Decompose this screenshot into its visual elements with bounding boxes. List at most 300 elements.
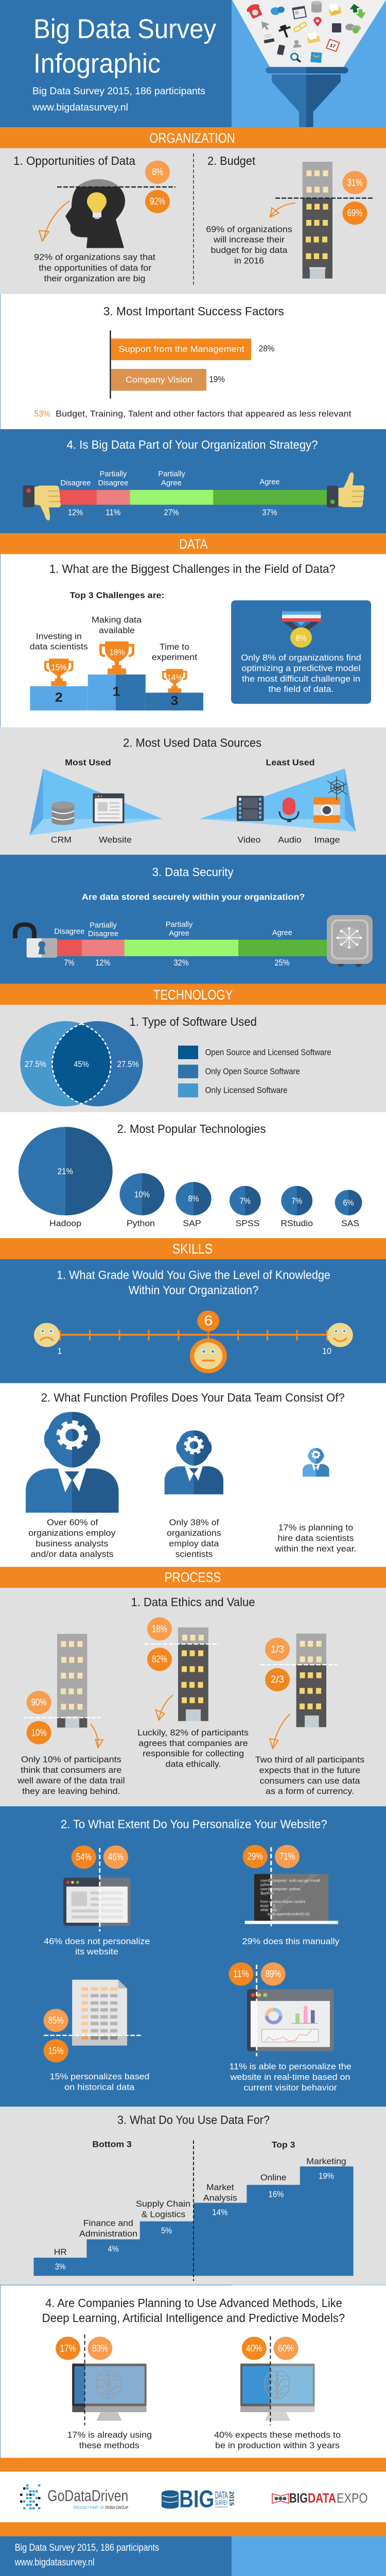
step: hr — [54, 2247, 67, 2272]
text: budget: budget for big data — [210, 246, 288, 255]
icon: browser window — [292, 6, 307, 20]
icon: analytics dashboard — [247, 1964, 334, 2056]
text: already using: these methods — [79, 2441, 139, 2450]
code snippet: python — [260, 1883, 271, 1887]
bubble: rstudio: 7% — [291, 1196, 302, 1206]
text: data scientists: scientists — [176, 1549, 213, 1559]
logos panel — [0, 2471, 386, 2522]
text: opportunities: their organization are big — [44, 274, 145, 283]
code snippet — [260, 1878, 320, 1917]
text: planning to hire: within the next year. — [274, 1544, 357, 1553]
heading: strategy: 4. Is Big Data Part of Your Organization Strategy? — [67, 438, 318, 452]
panel: data sources — [0, 727, 386, 855]
step: online — [260, 2173, 287, 2199]
step: marketing: Marketing — [306, 2157, 346, 2166]
heading: knowledge grade: Within Your Organization? — [129, 1284, 258, 1297]
arrow: opportunities — [39, 201, 69, 241]
labels: strategy: Disagree — [60, 479, 91, 487]
logo: godatadriven: GoDataDriven — [47, 2487, 128, 2504]
section band: technology: TECHNOLOGY — [153, 987, 233, 1003]
percent bubble 82% — [147, 1648, 172, 1671]
text: 82% — [137, 1728, 249, 1769]
bubble: hadoop — [19, 1127, 113, 1215]
percent bubble 40%: 40% — [246, 2343, 262, 2354]
heading: data usage: 3. What Do You Use Data For? — [117, 2113, 270, 2127]
panel: popular technologies — [0, 1112, 386, 1238]
icon: sad face — [34, 1323, 60, 1347]
text: analysts: and/or data analysts — [30, 1549, 113, 1559]
subheading: top 3: Top 3 Challenges are: — [69, 590, 164, 600]
step: market analysis: Analysis — [203, 2193, 237, 2202]
bubble 1/3: 1/3 — [271, 1644, 284, 1655]
labels: data sources: Video — [237, 835, 260, 844]
text: budget — [206, 225, 292, 265]
labels: data sources — [51, 835, 340, 844]
values: strategy: 37% — [262, 508, 277, 517]
percent bubble 31% — [343, 171, 367, 194]
heading: knowledge grade — [57, 1268, 330, 1297]
percent bubble 15% — [44, 2039, 68, 2062]
arrow: 82% — [155, 1695, 173, 1720]
percent bubble 69% — [343, 201, 367, 225]
logo: big data survey 2015: 2015 — [228, 2491, 235, 2506]
footer: Big Data Survey 2015, 186 participants — [15, 2543, 159, 2553]
title: Infographic — [33, 48, 161, 79]
subtitle and website: Big Data Survey 2015, 186 participants — [32, 86, 205, 97]
labels: data sources: CRM — [51, 835, 72, 844]
callout: predictive model: the field of data. — [269, 685, 334, 694]
labels: security — [54, 920, 292, 938]
labels: strategy: Partially — [100, 470, 127, 479]
icon: chat bubbles — [271, 7, 285, 15]
icon: router — [262, 33, 275, 43]
text: two thirds: expects that in the future — [259, 1766, 360, 1775]
text: 82%: agrees that companies are — [138, 1739, 248, 1748]
icon: neutral face — [190, 1338, 227, 1373]
step: supply chain and logistics: & Logistics — [142, 2210, 185, 2219]
labels: challenges — [30, 615, 198, 662]
panel: success factors — [0, 294, 386, 429]
percent bubble 15%: 15% — [48, 2046, 64, 2057]
heading: knowledge grade: 1. What Grade Would You Give the Level of Knowledge — [57, 1268, 330, 1282]
heading: data ethics: 1. Data Ethics and Value — [131, 1596, 255, 1609]
text: two thirds: consumers can use data — [259, 1776, 360, 1786]
code snippet: from random import randint — [260, 1900, 305, 1904]
text: real-time: website in real-time based on — [230, 2073, 350, 2082]
text: data scientists: Only 38% of — [169, 1518, 219, 1527]
podium chart: 3 — [170, 693, 179, 708]
heading: data sources: 2. Most Used Data Sources — [123, 736, 261, 750]
trophy 18%: 18% — [110, 648, 125, 657]
labels: data sources: Audio — [278, 835, 302, 844]
percent bubble 11%: 11% — [233, 1969, 249, 1980]
percent bubble 60% — [274, 2337, 299, 2360]
logo: godatadriven: PROUDLY PART OF — [74, 2505, 104, 2510]
section band: organization — [0, 127, 386, 148]
subheading: most used: Most Used — [65, 757, 111, 767]
arrow: budget — [270, 203, 295, 217]
icon: cloud sync — [345, 24, 361, 33]
bubble: sas: 6% — [343, 1198, 354, 1208]
logo: big data expo: EXPO — [337, 2490, 367, 2505]
icon: building two thirds — [260, 1634, 338, 1727]
icon: envelope — [327, 3, 342, 16]
icon: user — [293, 40, 302, 48]
percent bubble 10% — [27, 1721, 51, 1744]
text: already using — [67, 2430, 152, 2450]
logo: big data survey 2015: www.bigdatasurvey.nl — [215, 2505, 228, 2508]
icon: thumb down — [23, 485, 61, 520]
text: two thirds: Two third of all participants — [255, 1755, 364, 1765]
bubble: sap: 8% — [188, 1194, 199, 1204]
percent bubble 82%: 82% — [152, 1654, 167, 1665]
icon: audio microphone — [279, 798, 299, 822]
subheading: bottom 3: Bottom 3 — [92, 2139, 132, 2149]
text: expects in production: be in production within 3 years — [215, 2441, 340, 2450]
labels: data sources: Website — [99, 835, 132, 844]
percent bubble 69%: 69% — [347, 208, 362, 218]
step: marketing: 19% — [319, 2172, 334, 2181]
section band: technology — [0, 984, 386, 1005]
podium chart: 2 — [55, 690, 63, 705]
orange divider band — [0, 2458, 386, 2471]
heading: software type: 1. Type of Software Used — [130, 1015, 257, 1029]
heading: budget: 2. Budget — [207, 155, 255, 168]
funnel — [232, 0, 386, 127]
text: budget: in 2016 — [234, 256, 264, 265]
percent bubble 89%: 89% — [266, 1969, 281, 1980]
icon: head with light bulb — [57, 179, 176, 248]
logo: godatadriven — [20, 2484, 129, 2510]
icon: monitor already using — [72, 2334, 147, 2426]
logo: big data survey 2015 — [162, 2486, 235, 2513]
percent bubble 46% — [103, 1845, 128, 1869]
orange divider band — [0, 2522, 386, 2536]
panel: data ethics — [0, 1588, 386, 1806]
trophy 14%: 14% — [167, 673, 183, 683]
icon: data sheet — [44, 1980, 141, 2045]
text: historical data — [50, 2072, 149, 2092]
subtitle and website: www.bigdatasurvey.nl — [32, 102, 128, 113]
legend: Open Source and Licensed Software — [205, 1047, 331, 1057]
percent bubble 85%: 85% — [48, 2015, 64, 2026]
trophy 18% — [101, 641, 133, 674]
heading: personalization: 2. To What Extent Do You Personalize Your Website? — [61, 1818, 327, 1831]
spotlight: most used — [29, 769, 163, 835]
text: expects in production: 40% expects these methods to — [214, 2430, 341, 2440]
code snippet: while True: — [260, 1908, 277, 1912]
icon: green arrows — [349, 2, 367, 21]
text: two thirds — [255, 1755, 364, 1796]
labels: technologies: Hadoop — [49, 1218, 81, 1228]
percent bubble 10%: 10% — [31, 1727, 47, 1738]
bubble: sap — [176, 1182, 211, 1215]
labels: strategy — [60, 470, 279, 487]
percent bubble 71%: 71% — [279, 1851, 295, 1862]
text: 10%: think that consumers are — [21, 1766, 121, 1775]
text: expects in production — [214, 2430, 341, 2450]
text: two thirds: as a form of currency. — [266, 1787, 354, 1796]
heading: success factors: 3. Most Important Success Factors — [103, 305, 284, 318]
icon: database — [311, 1, 322, 12]
icon: thumb up — [327, 472, 364, 507]
subheading: least used: Least Used — [266, 757, 314, 767]
logo: big data survey 2015: BIG — [179, 2486, 214, 2513]
step: market analysis: 14% — [212, 2208, 227, 2217]
labels: challenges: Making data — [92, 615, 142, 624]
percent bubble 46%: 46% — [108, 1852, 124, 1863]
panel: personalization — [0, 1806, 386, 2107]
icon: budget building — [275, 162, 374, 279]
venn diagram — [20, 1021, 143, 1106]
labels: technologies: SPSS — [235, 1218, 259, 1228]
text: real-time: current visitor behavior — [243, 2083, 337, 2092]
staircase chart — [34, 2141, 354, 2281]
legend — [178, 1046, 331, 1097]
code snippet: teste = [] — [260, 1904, 275, 1908]
spotlight: least used — [200, 769, 356, 832]
heading: opportunities of data: 1. Opportunities of Data — [13, 155, 135, 168]
logo: big data survey 2015: DATA — [215, 2490, 228, 2501]
labels: technologies: RStudio — [280, 1218, 313, 1228]
text: opportunities — [34, 252, 155, 283]
labels: security: Disagree — [88, 930, 118, 938]
bubble: spss: 7% — [240, 1196, 251, 1206]
step: market analysis — [203, 2183, 237, 2217]
podium chart — [30, 641, 203, 710]
callout: predictive model — [231, 600, 371, 704]
labels: security: Partially — [90, 921, 117, 929]
callout: predictive model: optimizing a predictive model — [242, 664, 360, 673]
logo: big data expo: BIG — [289, 2490, 308, 2505]
panel: opportunities and budget — [0, 148, 386, 294]
text: budget: 69% of organizations — [206, 225, 292, 234]
text: 10% — [17, 1755, 125, 1796]
percent bubble 71% — [275, 1845, 300, 1868]
labels: challenges: experiment — [152, 653, 198, 662]
text: real-time — [229, 2062, 352, 2092]
percent bubble 90%: 90% — [31, 1697, 47, 1708]
text: analysts: business analysts — [36, 1539, 108, 1548]
labels: challenges: available — [99, 625, 135, 635]
scale label 1: 1 — [57, 1346, 62, 1356]
trophy 15% — [45, 658, 73, 686]
trophy 15%: 15% — [51, 663, 66, 672]
heading: popular technologies: 2. Most Popular Technologies — [117, 1123, 266, 1136]
bar: support from the management: Support from the Management — [119, 344, 244, 354]
heading: data security: 3. Data Security — [152, 866, 234, 879]
step: finance and administration: 4% — [108, 2244, 118, 2253]
arrow: 10% — [91, 1724, 103, 1748]
arrow: two thirds — [270, 1714, 290, 1749]
percent bubble 83% — [87, 2337, 112, 2360]
bubble: sas — [335, 1190, 362, 1215]
percent bubble 40% — [242, 2337, 267, 2360]
logo: godatadriven: XEBIA GROUP — [105, 2505, 129, 2510]
legend: Only Licensed Software — [205, 1086, 288, 1095]
labels: security: Agree — [272, 928, 292, 937]
icon: spider web — [327, 776, 347, 800]
heading: advanced methods: Deep Learning, Artificial Intelligence and Predictive Models? — [42, 2312, 345, 2325]
footer: www.bigdatasurvey.nl — [14, 2557, 95, 2568]
text: historical data: 15% personalizes based — [50, 2072, 149, 2081]
section band: data: DATA — [179, 536, 207, 552]
labels: security: Agree — [169, 929, 189, 938]
step: finance and administration: Finance and — [83, 2218, 133, 2228]
icon: magnifier — [291, 54, 301, 62]
note: other factors: Budget, Training, Talent and other factors that appeared as less relevant — [56, 409, 352, 418]
values: strategy: 11% — [106, 508, 120, 517]
icon: map pin — [313, 17, 322, 27]
values: security: 32% — [173, 958, 188, 968]
icon: chain link — [293, 22, 307, 32]
podium chart: 1 — [112, 684, 120, 699]
labels: challenges: Time to — [160, 642, 189, 652]
text: already using: 17% is already using — [67, 2430, 152, 2440]
labels: challenges: Investing in — [36, 632, 82, 641]
step: marketing — [306, 2157, 346, 2181]
code snippet: user@computer: python — [260, 1887, 300, 1891]
labels: challenges: data scientists — [30, 642, 88, 651]
icon: happy face — [327, 1323, 353, 1347]
percent bubble 92% — [145, 190, 170, 213]
title: Big Data Survey — [33, 13, 217, 44]
section band: organization: ORGANIZATION — [149, 130, 235, 146]
bubble 2/3 — [265, 1668, 290, 1691]
labels: strategy: Partially — [158, 470, 185, 479]
step: supply chain and logistics: 5% — [161, 2226, 172, 2235]
labels: security: Partially — [166, 920, 193, 929]
percent bubble 92%: 92% — [150, 196, 165, 207]
icon: crm database — [51, 801, 74, 825]
percent bubble 89% — [261, 1962, 286, 1986]
values: strategy: 12% — [68, 508, 83, 517]
icon: website — [93, 793, 125, 823]
bar: support from the management — [111, 338, 274, 360]
callout: predictive model: the most difficult challenge in — [242, 674, 360, 684]
heading: team profiles: 2. What Function Profiles Does Your Data Team Consist Of? — [41, 1391, 345, 1404]
text: historical data: on historical data — [64, 2082, 135, 2092]
icon: medal: 8% — [295, 633, 307, 643]
text: 10%: Only 10% of participants — [21, 1755, 121, 1765]
bar: company vision: Company Vision — [126, 375, 192, 384]
panel: data usage — [0, 2107, 386, 2285]
values: security: 12% — [95, 958, 110, 968]
text: data scientists — [167, 1518, 221, 1559]
icon: smartphone — [277, 44, 285, 55]
venn diagram: 27.5% — [25, 1059, 46, 1069]
heading: biggest challenges: 1. What are the Biggest Challenges in the Field of Data? — [49, 563, 336, 576]
percent bubble 54%: 54% — [76, 1852, 92, 1863]
step: online: Online — [260, 2173, 287, 2182]
icon: building 10% — [24, 1634, 101, 1727]
footer — [0, 2536, 386, 2576]
logo: big data expo: DATA — [308, 2490, 336, 2505]
icon: tablet — [332, 23, 341, 32]
percent bubble 83%: 83% — [92, 2343, 108, 2354]
code snippet: user@computer: sudo apt-get install — [260, 1878, 320, 1883]
bubble: spss — [230, 1186, 261, 1215]
percent bubble 8% — [145, 161, 170, 184]
icon: monitor expecting — [240, 2336, 315, 2426]
panel: software type — [0, 1005, 386, 1112]
stacked bar: strategy — [58, 490, 327, 505]
heading: advanced methods — [42, 2297, 345, 2325]
bubble: python — [119, 1173, 165, 1215]
icon: tools — [277, 23, 293, 39]
text: 82%: Luckily, 82% of participants — [137, 1728, 249, 1737]
values: security: 7% — [64, 958, 74, 968]
step: finance and administration: Administration — [79, 2229, 137, 2239]
bubble: hadoop: 21% — [58, 1166, 73, 1176]
code snippet: teste.append(randint(0,9)) — [268, 1912, 310, 1917]
title — [33, 13, 217, 79]
header panel — [0, 0, 386, 127]
section band: process — [0, 1567, 386, 1588]
values: strategy — [68, 508, 277, 517]
percent bubble 85% — [44, 2009, 68, 2032]
icon: open envelope — [306, 31, 320, 44]
labels: technologies: SAP — [183, 1218, 201, 1228]
logo: big data expo — [272, 2490, 367, 2505]
icon: calendar — [326, 39, 339, 51]
text: analysts: organizations employ — [28, 1529, 116, 1538]
panel: knowledge grade — [0, 1259, 386, 1383]
subtitle and website — [32, 86, 205, 113]
bar: company vision: 19% — [209, 375, 225, 384]
icon: cursor — [261, 21, 270, 30]
text: 82%: responsible for collecting — [143, 1749, 244, 1758]
text: data scientists: organizations — [167, 1529, 221, 1538]
icon: open padlock — [15, 924, 57, 958]
bubble 1/3 — [265, 1638, 290, 1661]
icon: medium person — [165, 1430, 223, 1495]
labels: technologies — [49, 1218, 359, 1228]
icon: browser no personalization — [63, 1848, 131, 1931]
question: data stored securely: Are data stored securely within your organization? — [82, 892, 305, 902]
section band: data — [0, 533, 386, 554]
labels: technologies: Python — [127, 1218, 155, 1228]
labels: security: Disagree — [54, 927, 84, 936]
icon: video film — [237, 796, 264, 821]
section band: skills: SKILLS — [172, 1241, 213, 1257]
labels: strategy: Disagree — [98, 479, 128, 487]
icon: small person — [303, 1448, 329, 1477]
labels: strategy: Agree — [259, 478, 280, 486]
code snippet: $python — [260, 1891, 274, 1895]
text: opportunities: the opportunities of data for — [39, 263, 152, 273]
panel: biggest challenges — [0, 554, 386, 727]
text: no personalization: its website — [75, 1947, 118, 1957]
step: market analysis: Market — [206, 2183, 234, 2192]
text: analysts — [28, 1518, 116, 1559]
icon: red telephone — [245, 3, 264, 20]
bubble: rstudio — [281, 1186, 312, 1215]
callout: predictive model: Only 8% of organizations find — [241, 653, 361, 663]
text: planning to hire: 17% is planning to — [278, 1523, 353, 1533]
bar: support from the management: 28% — [259, 344, 274, 353]
icon: large person — [26, 1412, 119, 1513]
heading: advanced methods: 4. Are Companies Planning to Use Advanced Methods, Like — [45, 2297, 342, 2310]
venn diagram: 27.5% — [117, 1059, 139, 1069]
values: security: 25% — [275, 958, 289, 968]
section band: skills — [0, 1238, 386, 1259]
icon: shopping bag — [310, 52, 322, 63]
icon: image camera — [313, 797, 340, 823]
text: opportunities: 92% of organizations say that — [34, 252, 155, 262]
text: analysts: Over 60% of — [47, 1518, 98, 1527]
panel: advanced methods — [0, 2284, 386, 2458]
